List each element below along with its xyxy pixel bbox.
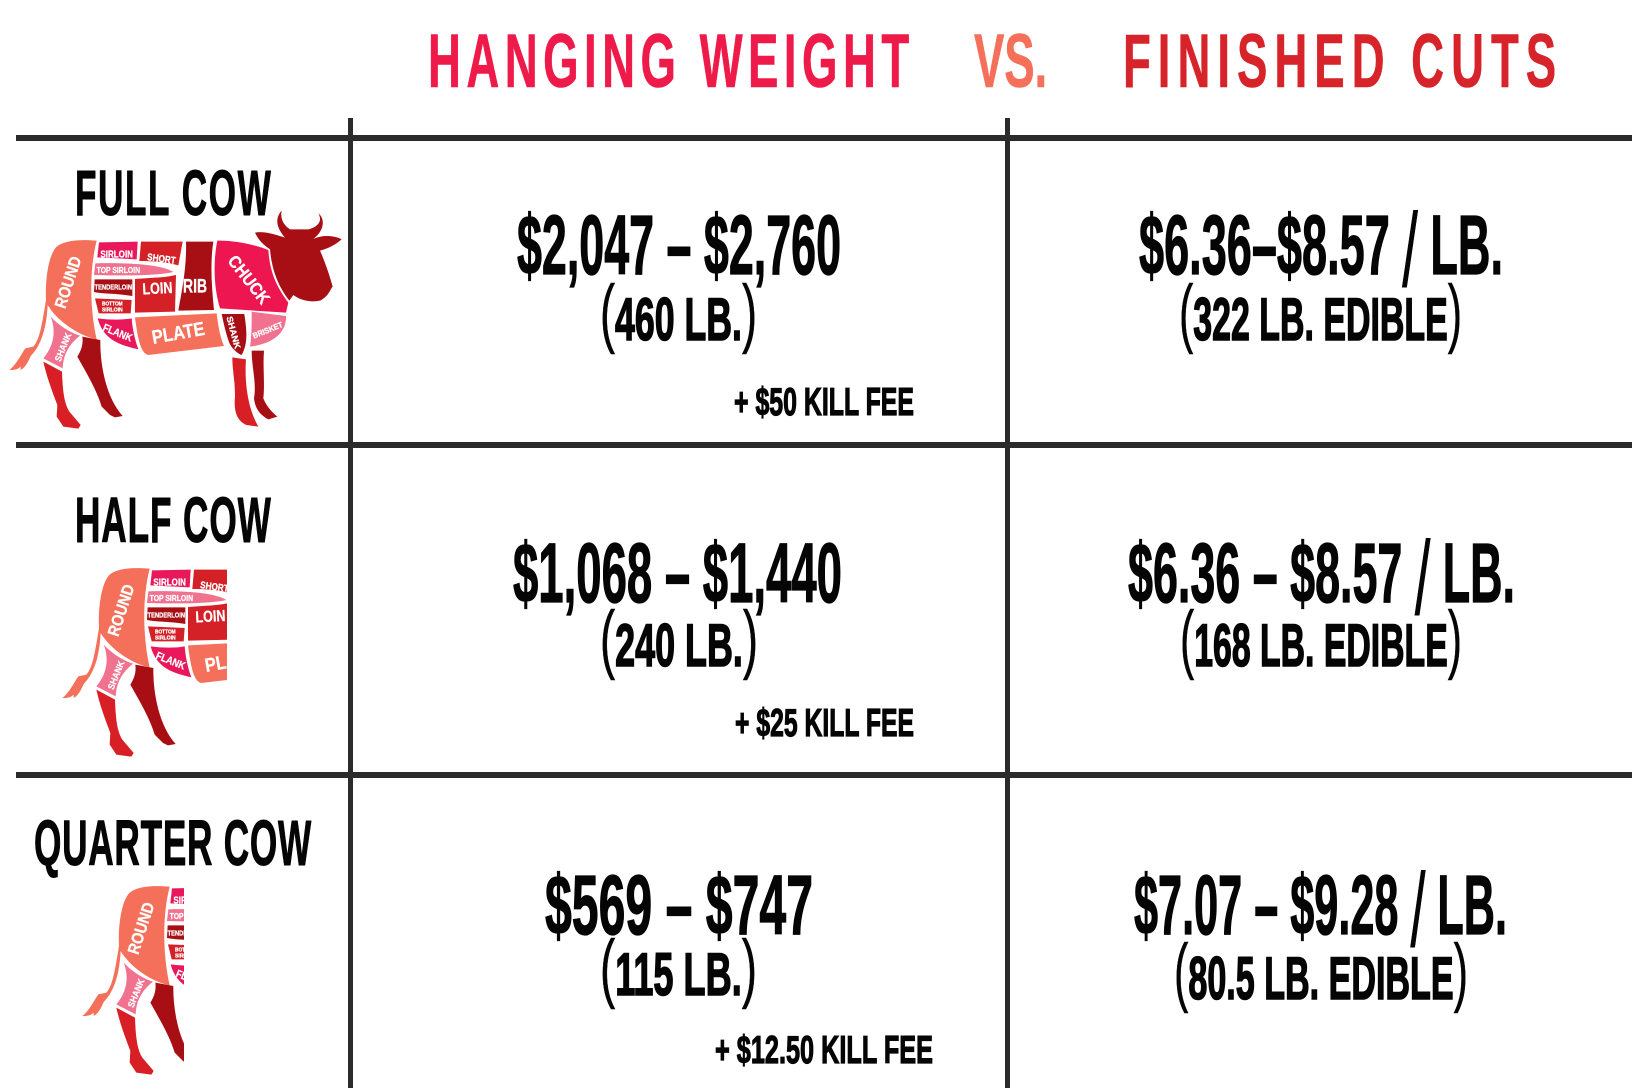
- kill fee: + $50 KILL FEE: [734, 381, 914, 424]
- weight: (: [600, 596, 615, 681]
- weight: 460 LB.: [615, 286, 742, 353]
- edible weight: ): [1454, 929, 1468, 1014]
- label: full cow: FULL COW: [75, 157, 271, 229]
- icon: full cow butcher diagram: LOIN: [142, 280, 173, 298]
- weight: ): [742, 925, 757, 1010]
- price per pound: /: [1402, 193, 1418, 309]
- weight: (: [600, 270, 615, 355]
- text: LB.: [1425, 858, 1507, 952]
- icon: half cow butcher diagram: SIRLOIN: [155, 635, 176, 641]
- row: half cow label and illustration: [62, 484, 277, 757]
- weight: (: [600, 925, 615, 1010]
- icon: half cow butcher diagram: FLANK: [154, 650, 187, 673]
- icon: full cow butcher diagram: TOP SIRLOIN: [97, 265, 140, 275]
- row: quarter cow label and illustration: [34, 807, 311, 1075]
- edible weight: (: [1180, 596, 1194, 681]
- label: half cow: HALF COW: [75, 484, 271, 556]
- row: full cow label and illustration: [9, 157, 342, 429]
- price range: $569 – $747: [545, 858, 813, 952]
- icon: quarter cow butcher diagram: SHANK: [126, 977, 147, 1009]
- edible weight: ): [1448, 270, 1462, 355]
- weight: 115 LB.: [615, 941, 742, 1008]
- text: LB.: [1418, 198, 1503, 292]
- weight: ): [743, 596, 758, 681]
- icon: full cow butcher diagram: ROUND: [51, 254, 85, 311]
- icon: full cow butcher diagram: SIRLOIN: [102, 307, 123, 313]
- icon: half cow butcher diagram: SIRLOIN: [153, 577, 186, 588]
- panel: full cow finished cuts: [1139, 193, 1503, 355]
- icon: half cow butcher diagram: [62, 568, 227, 757]
- icon: quarter cow butcher diagram: TOP SIRLOIN: [170, 911, 213, 921]
- edible weight: (: [1179, 270, 1193, 355]
- icon: full cow butcher diagram: SIRLOIN: [100, 249, 133, 260]
- icon: half cow butcher diagram: TENDERLOIN: [148, 613, 185, 620]
- icon: half cow butcher diagram: SHORT: [199, 580, 229, 595]
- icon: quarter cow butcher diagram: TENDERLOIN: [168, 931, 205, 938]
- icon: half cow butcher diagram: ROUND: [104, 582, 138, 639]
- kill fee: + $12.50 KILL FEE: [715, 1029, 933, 1072]
- title: [428, 19, 1556, 104]
- label: quarter cow: QUARTER COW: [34, 807, 311, 879]
- icon: full cow butcher diagram: SHANK: [53, 331, 74, 363]
- heading: vs: VS.: [974, 19, 1047, 104]
- icon: full cow butcher diagram: BOTTOM: [102, 302, 123, 308]
- icon: half cow butcher diagram: SHANK: [106, 659, 127, 691]
- heading: hanging weight: HANGING WEIGHT: [428, 19, 909, 104]
- icon: full cow butcher diagram: FLANK: [101, 322, 134, 345]
- price range: $1,068 – $1,440: [513, 526, 842, 620]
- icon: half cow butcher diagram: TOP SIRLOIN: [150, 593, 193, 603]
- icon: full cow butcher diagram: SHANK: [224, 315, 243, 351]
- icon: quarter cow butcher diagram: FLANK: [174, 968, 207, 991]
- price per pound: $6.36 – $8.57: [1128, 526, 1632, 620]
- panel: quarter cow finished cuts: [1134, 853, 1507, 1014]
- panel: half cow finished cuts: [1128, 521, 1515, 681]
- icon: half cow butcher diagram: PLATE: [203, 647, 260, 677]
- weight: 240 LB.: [615, 612, 743, 679]
- icon: quarter cow butcher diagram: BOTTOM: [175, 948, 196, 954]
- price per pound: /: [1410, 853, 1425, 969]
- panel: half cow hanging weight: [513, 526, 914, 745]
- icon: full cow butcher diagram: RIB: [183, 277, 207, 298]
- icon: quarter cow butcher diagram: SIRLOIN: [173, 895, 206, 906]
- text: LB.: [1430, 526, 1515, 620]
- price per pound: /: [1415, 521, 1430, 637]
- edible weight: 168 LB. EDIBLE: [1194, 612, 1448, 679]
- icon: half cow butcher diagram: LOIN: [195, 608, 226, 626]
- icon: quarter cow butcher diagram: [82, 886, 184, 1075]
- price per pound: $6.36–$8.57: [1139, 198, 1606, 292]
- price range: $2,047 – $2,760: [517, 198, 841, 292]
- icon: quarter cow butcher diagram: ROUND: [124, 900, 158, 957]
- icon: quarter cow butcher diagram: SIRLOIN: [175, 953, 196, 959]
- edible weight: ): [1448, 596, 1462, 681]
- panel: full cow hanging weight: [517, 198, 914, 424]
- heading: finished cuts: FINISHED CUTS: [1123, 19, 1556, 104]
- panel: quarter cow hanging weight: [545, 858, 933, 1072]
- icon: half cow butcher diagram: BOTTOM: [155, 630, 176, 636]
- edible weight: (: [1174, 929, 1188, 1014]
- icon: full cow butcher diagram: [9, 211, 342, 429]
- icon: full cow butcher diagram: SHORT: [146, 252, 176, 267]
- weight: ): [742, 270, 757, 355]
- kill fee: + $25 KILL FEE: [735, 702, 914, 745]
- edible weight: 322 LB. EDIBLE: [1193, 286, 1448, 353]
- icon: full cow butcher diagram: PLATE: [150, 319, 207, 349]
- icon: full cow butcher diagram: BRISKET: [251, 320, 284, 340]
- icon: full cow butcher diagram: CHUCK: [224, 251, 275, 308]
- icon: full cow butcher diagram: TENDERLOIN: [95, 285, 132, 292]
